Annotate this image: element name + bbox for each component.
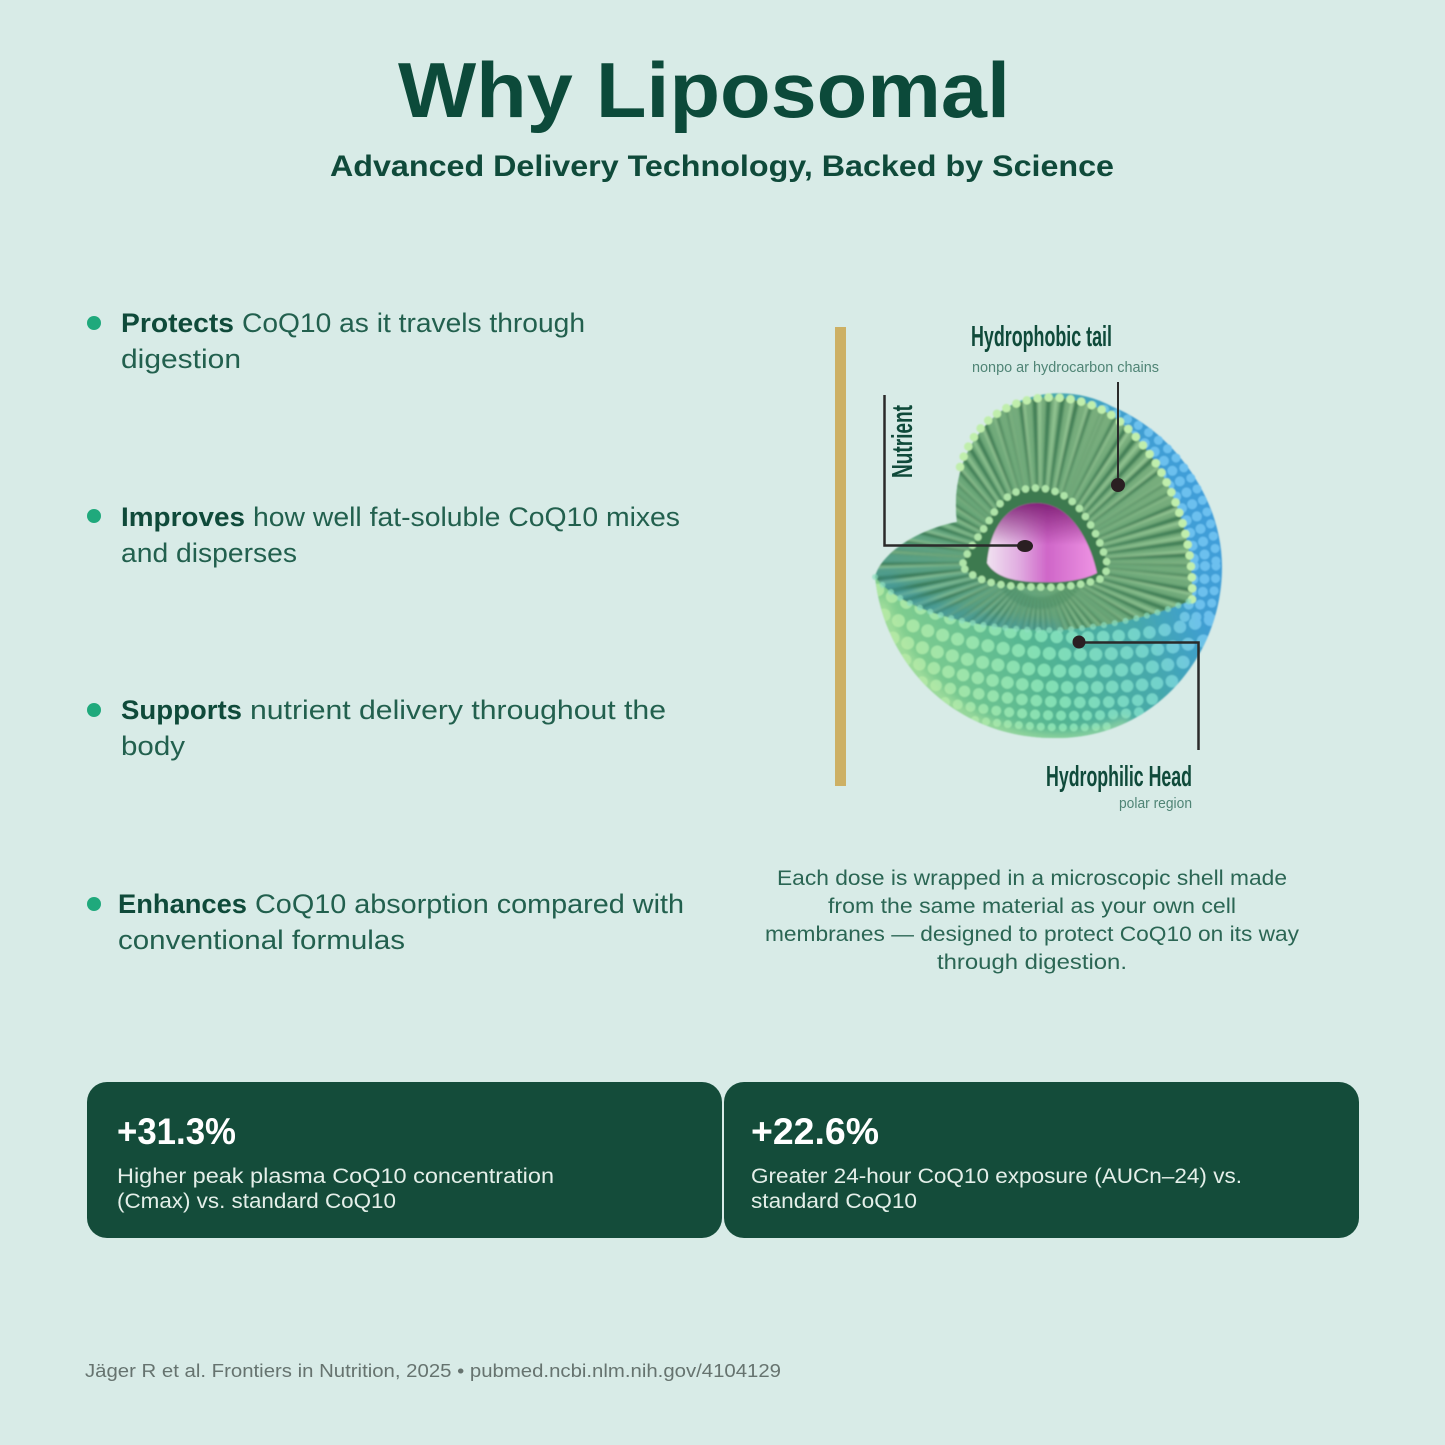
benefit: improves: Improves [121,502,245,532]
benefit: supports [87,695,666,761]
callout: nutrient [884,395,1033,552]
radial hydrophobic tails [880,447,1155,677]
callout: hydrophobic tail [971,321,1159,492]
benefit: improves: how well fat-soluble CoQ10 mixes [253,502,680,532]
source citation: Jäger R et al. Frontiers in Nutrition, 2025 • pubmed.ncbi.nlm.nih.gov/4104129 [85,1360,781,1381]
benefit: enhances: conventional formulas [118,925,405,955]
outer head row [960,397,1192,600]
description paragraph: Each dose is wrapped in a microscopic shell made [777,867,1287,890]
stat card: Cmax [87,1082,722,1238]
gold vertical bar [835,327,846,786]
stat card: Cmax: +31.3% [117,1111,236,1152]
stat card: AUC: Greater 24-hour CoQ10 exposure (AUCn–24) vs. [751,1165,1242,1188]
description paragraph: from the same material as your own cell [828,895,1236,918]
benefit: improves: and disperses [121,538,297,568]
benefit: supports: nutrient delivery throughout the [250,695,666,725]
bottom edge glow [880,600,1130,740]
lower disc teal tint [880,580,1060,632]
description paragraph: membranes — designed to protect CoQ10 on its way [765,923,1300,946]
stat card: Cmax: (Cmax) vs. standard CoQ10 [117,1190,396,1213]
benefit: protects [87,308,585,374]
callout: hydrophilic head: Hydrophilic Head [1046,761,1192,793]
description paragraph [765,867,1300,974]
stat card: AUC: +22.6% [751,1111,879,1152]
stat card: AUC [724,1082,1359,1238]
inner head ring [963,488,1107,587]
benefit: protects: CoQ10 as it travels through [242,308,585,338]
stat card: Cmax: Higher peak plasma CoQ10 concentration [117,1165,554,1188]
benefit: improves [87,502,680,568]
benefit: enhances: CoQ10 absorption compared with [255,889,684,919]
liposome illustration [875,393,1222,740]
callout: hydrophilic head: polar region [1119,795,1192,812]
callout: hydrophobic tail: Hydrophobic tail [971,321,1112,353]
subtitle: Advanced Delivery Technology, Backed by Science [330,150,1114,183]
benefit: enhances [87,889,684,955]
front shell bead rows [878,590,1216,728]
benefit: protects: Protects [121,308,234,338]
back shell beads [1094,402,1221,622]
benefit: protects: digestion [121,344,241,374]
callout: hydrophobic tail: nonpo ar hydrocarbon chains [972,359,1159,376]
stat card: AUC: standard CoQ10 [751,1190,917,1213]
outer shell [875,393,1222,738]
benefit: enhances: Enhances [118,889,247,919]
description paragraph: through digestion. [937,951,1127,974]
benefit: supports: Supports [121,695,242,725]
benefit: supports: body [121,731,186,761]
nutrient core [987,503,1097,582]
rim head row [875,577,1192,630]
callout: nutrient: Nutrient [887,405,919,478]
title: Why Liposomal [398,46,1010,134]
callout: hydrophilic head [1046,636,1198,812]
bilayer cut face [875,397,1192,630]
